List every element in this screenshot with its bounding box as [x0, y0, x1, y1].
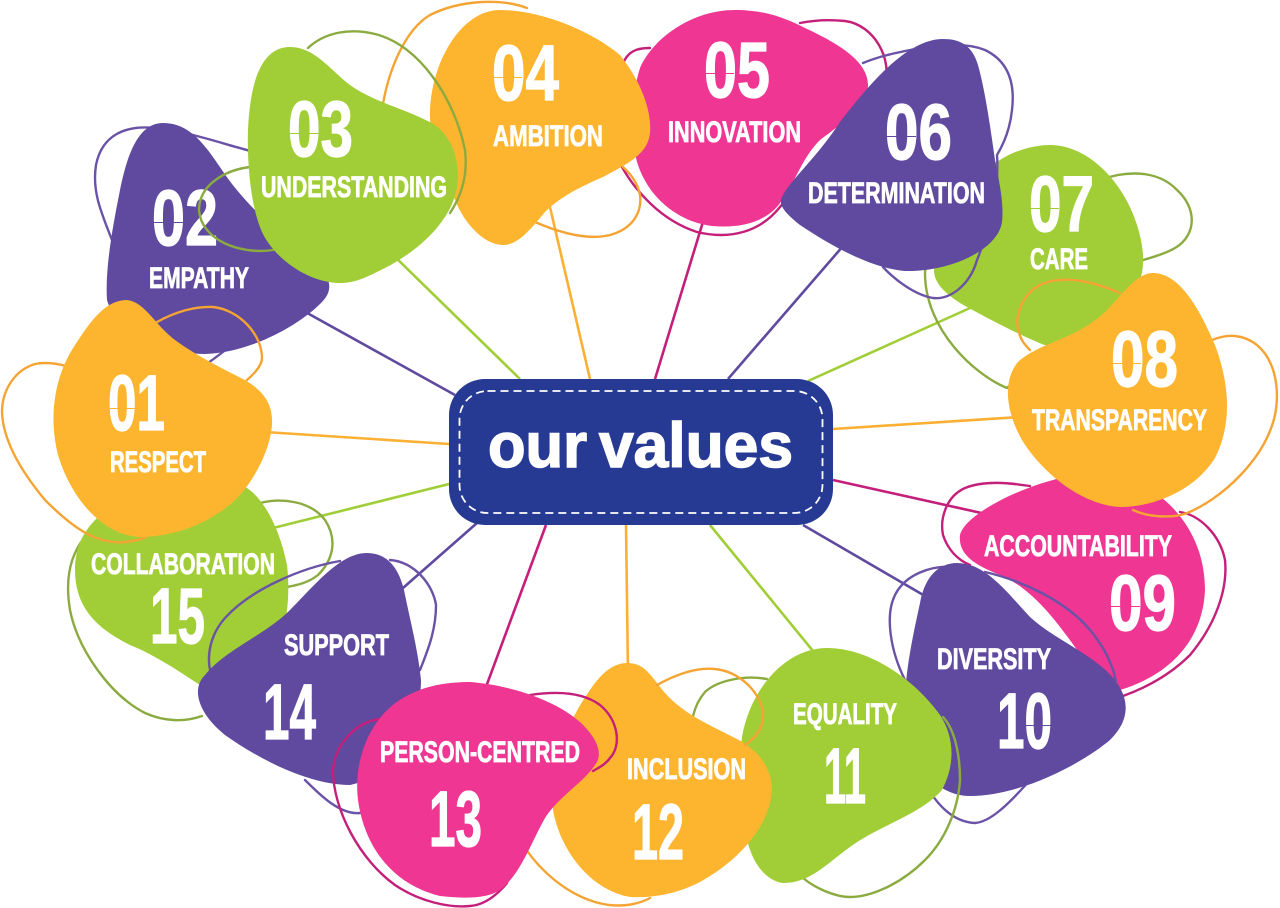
value 08 transparency	[1008, 273, 1277, 516]
value 03 understanding: 03	[288, 84, 353, 173]
value 12 inclusion: 12	[632, 787, 684, 876]
value 15 collaboration: 15	[150, 571, 205, 660]
value 10 diversity: 10	[997, 676, 1052, 765]
value 14 support: SUPPORT	[284, 629, 389, 662]
value 14 support: 14	[263, 667, 316, 756]
value 04 ambition: 04	[492, 28, 559, 117]
central badge: our values: values	[599, 411, 793, 481]
value 15 collaboration: COLLABORATION	[91, 548, 275, 581]
outline: value 03 right arc	[308, 31, 466, 213]
value 15 collaboration	[68, 481, 332, 720]
value 01 respect	[2, 300, 272, 542]
central badge: our values: our	[488, 411, 587, 481]
value 01 respect: 01	[108, 358, 165, 447]
outline: value 03 left arc	[199, 167, 273, 251]
value 11 equality: EQUALITY	[793, 698, 897, 731]
value 13 person-centred: 13	[429, 774, 482, 863]
value 09 accountability: ACCOUNTABILITY	[984, 530, 1172, 563]
value 06 determination	[781, 39, 1013, 298]
value 05 innovation	[616, 10, 887, 235]
value 05 innovation: 05	[704, 25, 770, 114]
value 08 transparency: TRANSPARENCY	[1032, 404, 1207, 437]
value 06 determination: DETERMINATION	[808, 177, 985, 210]
value 13 person-centred	[333, 682, 617, 906]
value 05 innovation: INNOVATION	[668, 116, 801, 149]
value 07 care: 07	[1029, 159, 1094, 248]
value 09 accountability: 09	[1109, 558, 1176, 647]
value 11 equality	[693, 648, 960, 897]
value 03 understanding: UNDERSTANDING	[261, 171, 447, 204]
value 04 ambition: AMBITION	[493, 120, 603, 153]
value 04 ambition	[382, 2, 650, 245]
value 14 support	[198, 553, 436, 813]
value 01 respect: RESPECT	[110, 446, 206, 479]
value 03 understanding	[248, 47, 458, 283]
value 10 diversity: DIVERSITY	[937, 643, 1051, 676]
value 08 transparency: 08	[1111, 314, 1178, 403]
value 11 equality: 11	[824, 731, 866, 820]
value 12 inclusion: INCLUSION	[627, 753, 746, 786]
value 10 diversity	[890, 563, 1126, 823]
value 12 inclusion	[525, 663, 772, 905]
value 02 empathy	[95, 123, 329, 370]
value 07 care	[925, 145, 1192, 388]
central badge: our values	[449, 379, 833, 525]
value 02 empathy: EMPATHY	[149, 262, 249, 295]
value 06 determination: 06	[885, 87, 952, 176]
connector lines	[265, 190, 1020, 695]
value 07 care: CARE	[1030, 243, 1088, 276]
value 13 person-centred: PERSON-CENTRED	[380, 736, 580, 769]
value 09 accountability	[942, 475, 1225, 696]
value 02 empathy: 02	[152, 173, 218, 262]
